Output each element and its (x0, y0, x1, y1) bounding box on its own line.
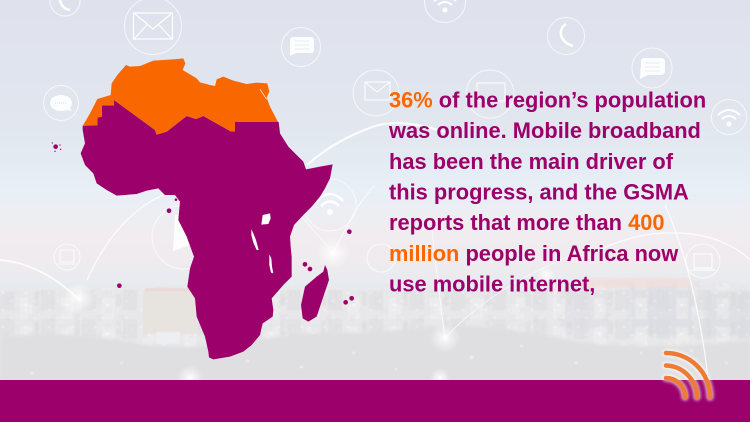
icon: envelope in circle (124, 0, 182, 54)
icon: phone (548, 18, 584, 54)
pink glow on horizon (580, 278, 690, 288)
map detail: Red Sea line (260, 89, 267, 99)
map detail: lakes (251, 213, 273, 273)
network arcs (0, 123, 750, 378)
city skyline (0, 278, 750, 382)
icon: chat bubble right (632, 48, 672, 88)
text: was online. Mobile broadband (388, 118, 701, 143)
text: use mobile internet, (389, 272, 595, 296)
map region: sub-Saharan Africa in purple (81, 100, 333, 359)
map region: North Africa in orange (83, 58, 278, 135)
text: has been the main driver of (389, 149, 674, 174)
map: Africa (52, 58, 354, 359)
body text: 36% (389, 88, 433, 112)
scattered lights on the hillside (30, 345, 728, 374)
map region: Madagascar (301, 265, 329, 322)
icon: laptop behind text (466, 70, 514, 118)
icon: wifi right (712, 100, 746, 134)
map detail: islands (52, 142, 354, 305)
icon: circle behind text (367, 244, 395, 272)
text: million people in Africa now (389, 241, 679, 266)
icon: oval chat bubble (44, 86, 78, 120)
icon: wifi beside map (304, 179, 356, 231)
logo: signal arcs (666, 353, 710, 397)
icon: laptop left (54, 244, 80, 270)
icon: chat bubble (282, 28, 320, 66)
text: this progress, and the GSMA (389, 180, 689, 204)
icon: large chat bubble behind map (152, 205, 216, 269)
lens flares (63, 237, 555, 391)
icon: phone top left (50, 0, 80, 16)
icon: laptop right (686, 244, 720, 278)
icon: wifi top (424, 0, 466, 22)
icon: envelope behind text (353, 70, 399, 116)
footer bar (0, 380, 750, 422)
text: reports that more than 400 (389, 210, 665, 235)
body text: of the region’s population (433, 88, 706, 112)
